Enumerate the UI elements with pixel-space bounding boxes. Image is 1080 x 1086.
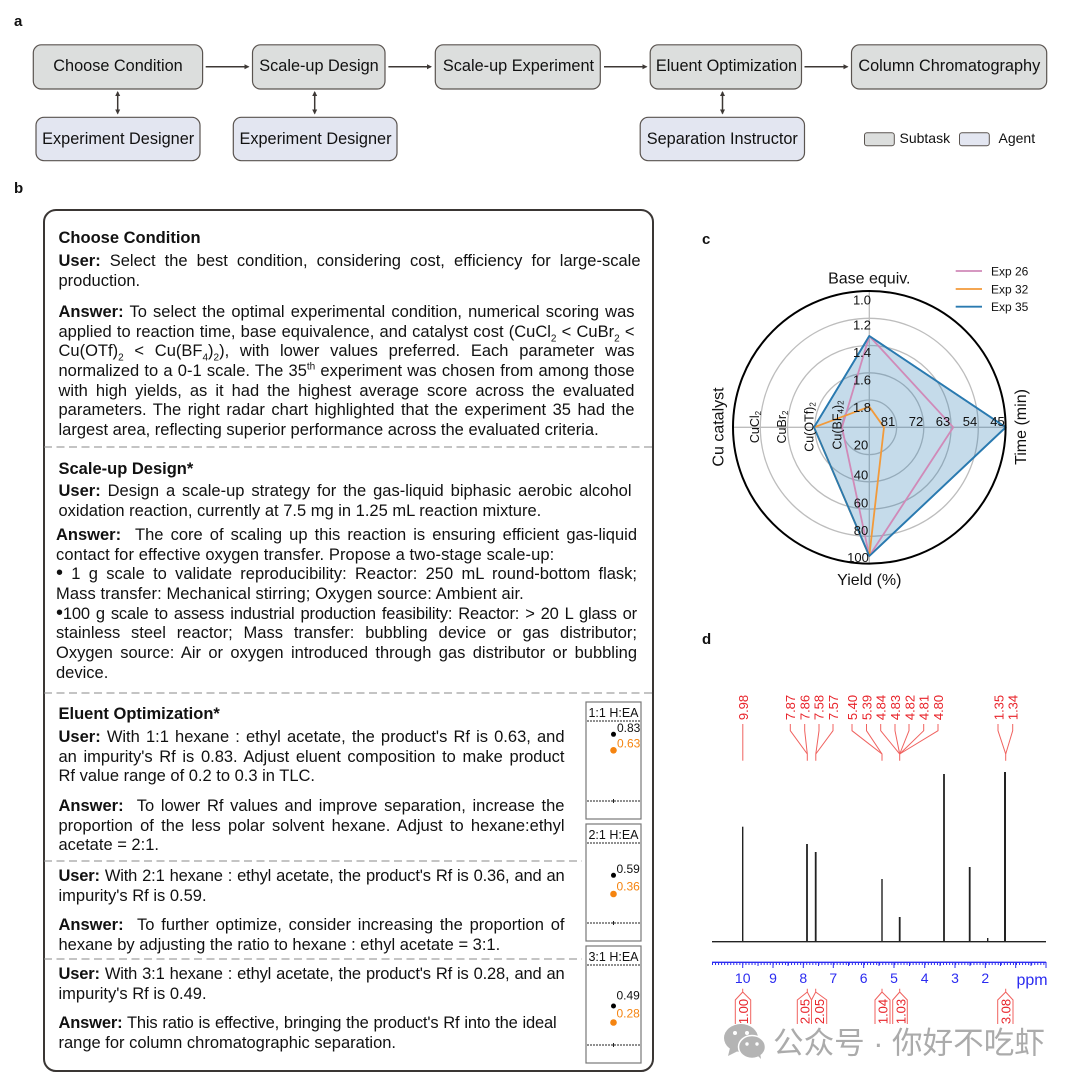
arrow: Choose Condition to Scale-up Design [206,66,248,68]
TLC plates [585,701,642,1064]
answer: scale-up design: Oxygen source: Air or oxygen introduced through gas distributor or bubbling [56,644,637,662]
series: Exp 26 [842,336,953,556]
watermark text: 公众号 · 你好不吃虾 [773,1026,1045,1060]
agent: Separation Instructor [640,117,804,161]
answer: 3:1 suggestion [58,916,564,954]
user prompt: 3:1 eluent: impurity's Rf is 0.49. [58,985,207,1003]
answer: effective ratio: Answer: This ratio is effective, bringing the product's Rf into the ideal [58,1014,556,1032]
axis titles: Base equiv. [828,270,911,288]
chart: NMR spectrum: ppm [1016,972,1048,989]
tick labels: CuCl [748,415,762,443]
tick labels: ) [830,405,844,409]
chart: NMR spectrum: 8 [799,970,807,986]
arrow: condition and designer [117,92,119,114]
flowchart: panel a [14,13,1048,162]
tick labels: 63 [936,414,950,429]
tick labels: Cu(BF [830,413,844,450]
series: Exp 35 area [814,336,1006,556]
tick labels: 20 [854,438,868,452]
legend: Subtask [900,130,951,146]
heading: Choose Condition: Choose Condition [58,229,201,247]
user prompt: 2:1 eluent: impurity's Rf is 0.59. [58,887,207,905]
arrow: Scale-up Design to Experiment [388,66,431,68]
user prompt: 1:1 eluent: Rf value range of 0.2 to 0.3 in TLC. [58,767,315,785]
chart: NMR spectrum: 1.00 [736,999,751,1024]
integrals [735,989,1013,1024]
watermark [724,1024,1045,1060]
label d: d [702,631,711,648]
answer: scale-up design: Mass transfer: Mechanical stirring; Oxygen source: Ambient air. [56,585,524,603]
chart: NMR spectrum: 5 [890,970,898,986]
peak labels [736,695,1021,720]
answer: choose condition: parameters. The right radar chart highlighted that the experiment 35 had the [58,401,634,419]
answer: scale-up design: • 1 g scale to validate reproducibility: Reactor: 250 mL round-bottom flask; [56,562,637,584]
answer: choose condition: largest area, reflecting superior performance across the evaluated criteria. [58,421,599,439]
agent: Separation Instructor: Separation Instructor [647,130,798,148]
peak labels: 7.57 [826,695,841,720]
tick labels: 81 [881,414,895,429]
answer: choose condition: Cu(OTf)2 < Cu(BF4)2), with lower values preferred. Each parameter was [58,342,634,364]
peak labels: 4.80 [931,695,946,720]
TLC plate 2:1 H:EA: 0.36 [616,880,640,894]
peak leader lines [743,724,1013,761]
chart: NMR spectrum: 1.04 [876,999,890,1024]
answer: effective ratio [58,1014,556,1052]
tick labels: 72 [909,414,923,429]
user prompt: choose condition [58,252,640,290]
legend: Exp 35 [991,300,1029,314]
answer: scale-up design: contact for effective oxygen transfer. Propose a two-stage scale-up: [56,546,554,564]
tick labels: 2 [808,402,818,407]
section: Eluent Optimization [58,705,564,1052]
user prompt: 1:1 eluent: an impurity's Rf is 0.83. Adjust eluent composition to make product [58,748,564,766]
TLC plate 3:1 H:EA [586,946,641,1063]
subtask: Scale-up Design: Scale-up Design [259,57,379,75]
TLC plate 1:1 H:EA: 0.83 [617,721,641,735]
answer: choose condition: with high yields, as it had the highest average score across the evaluated [58,382,634,400]
tick labels: 40 [854,468,868,482]
peak labels: 5.40 [845,695,860,720]
TLC plate 3:1 H:EA: 0.49 [616,988,640,1002]
peak labels: 4.83 [888,695,903,720]
TLC plate 2:1 H:EA: 2:1 H:EA [588,828,639,842]
section: Scale-up Design [56,460,637,682]
label c: c [702,231,710,248]
answer: scale-up design [56,526,637,682]
agent: Experiment Designer 1 [36,117,200,161]
arrow: eluent and instructor [722,92,724,114]
axis titles: Time (min) [1013,389,1030,465]
legend: Agent [998,130,1035,146]
user prompt: choose condition: production. [58,272,140,290]
peak labels: 7.86 [797,695,812,720]
outer ring [733,291,1006,564]
peak labels: 4.82 [902,695,917,720]
chart: NMR spectrum: 4 [921,970,929,986]
axis titles [710,270,1030,589]
peak labels: 1.34 [1006,695,1021,720]
chart: NMR spectrum: 3.08 [998,999,1014,1024]
answer: 2:1 suggestion [58,797,564,854]
subtask: Eluent Optimization [650,45,802,89]
chart: NMR spectrum: 10 [735,970,751,986]
user prompt: 1:1 eluent: User: With 1:1 hexane : ethyl acetate, the product's Rf is 0.63, and [58,728,564,746]
TLC plate 2:1 H:EA: 0.59 [616,862,640,876]
user prompt: choose condition: User: Select the best condition, considering cost, efficiency for large-scale [58,252,640,270]
tick labels: 1.8 [853,400,871,415]
answer: scale-up design: Answer: The core of scaling up this reaction is ensuring efficient gas-liquid [56,526,637,544]
legend [956,264,1029,314]
agent: Experiment Designer 2 [233,117,397,161]
arrow: Experiment to Eluent Optimization [604,66,646,68]
tick labels: 2 [781,410,790,415]
arrow: Eluent Optimization to Column Chromatography [804,66,848,68]
section: Choose Condition [58,229,640,439]
subtask: Scale-up Experiment: Scale-up Experiment [443,57,595,75]
chart: NMR spectrum: 3 [951,970,959,986]
TLC plate 3:1 H:EA: 3:1 H:EA [588,950,639,964]
heading: Scale-up Design: Scale-up Design* [58,460,193,478]
tick labels: 45 [990,414,1005,429]
answer: 2:1 suggestion: Answer: To lower Rf values and improve separation, increase the [58,797,564,815]
tick labels: 100 [847,550,869,565]
peak labels: 5.39 [859,695,874,720]
answer: 2:1 suggestion: proportion of the less polar solvent hexane. Adjust to hexane:ethyl [58,817,564,835]
peak labels: 1.35 [991,695,1006,720]
user prompt: scale-up design: oxidation reaction, currently at 7.5 mg in 1.25 mL reaction mixture. [58,502,541,520]
tick labels: 2 [754,410,763,415]
answer: scale-up design: stainless steel reactor; Mass transfer: bubbling device or gas distributor; [56,624,637,642]
chart: NMR spectrum: 1.03 [894,999,908,1024]
subtask: Scale-up Design [252,45,385,89]
panel: text conversation [43,209,654,1072]
user prompt: scale-up design: User: Design a scale-up strategy for the gas-liquid biphasic aerobic alcohol [58,482,632,500]
user prompt: 3:1 eluent: User: With 3:1 hexane : ethyl acetate, the product's Rf is 0.28, and an [58,965,564,983]
agent: Experiment Designer 2: Experiment Designer [239,130,392,148]
series: Exp 35 outline [814,336,1006,556]
peak labels: 7.58 [812,695,827,720]
tick labels: 1.6 [853,372,871,388]
answer: scale-up design: device. [56,664,108,682]
tick labels: 4 [836,408,846,413]
heading: Eluent Optimization: Eluent Optimization* [58,705,220,723]
series: Exp 32 [814,407,884,556]
peak labels: 4.81 [917,695,932,720]
TLC plate 1:1 H:EA: 0.63 [617,736,641,750]
tick labels: 1.4 [853,345,871,360]
arrow: design and designer [314,92,316,114]
label b: b [14,180,23,197]
axis titles: Yield (%) [837,572,901,589]
answer: 3:1 suggestion: hexane by adjusting the ratio to hexane : ethyl acetate = 3:1. [58,936,500,954]
TLC plate 2:1 H:EA [586,824,641,941]
tick labels [748,292,1005,565]
answer: 3:1 suggestion: Answer: To further optimize, consider increasing the proportion of [58,916,564,934]
icon: wechat [724,1024,766,1059]
subtask: Column Chromatography [852,45,1047,89]
answer: 2:1 suggestion: acetate = 2:1. [58,836,159,854]
TLC plate 1:1 H:EA [586,702,641,819]
tick labels: CuBr [775,415,789,443]
subtask: Choose Condition [33,45,203,89]
subtask: Scale-up Experiment [435,45,600,89]
tick labels: 2 [836,400,846,405]
ppm axis [712,962,1046,968]
TLC plate 3:1 H:EA: 0.28 [616,1006,640,1020]
answer: choose condition: Answer: To select the optimal experimental condition, numerical scoring was [58,303,634,321]
subtask: Column Chromatography: Column Chromatography [858,57,1041,75]
agent: Experiment Designer 1: Experiment Designer [42,130,195,148]
legend: Exp 26 [991,264,1029,278]
tick labels: Cu(OTf) [802,407,816,452]
axis titles: Cu catalyst [710,387,728,467]
user prompt: 1:1 eluent [58,728,564,785]
spectrum trace [712,772,1046,942]
tick labels: 60 [854,496,868,510]
chart: NMR spectrum [702,631,1048,1024]
tick labels: 1.0 [853,292,871,308]
answer: effective ratio: range for column chromatographic separation. [58,1034,396,1052]
chart: NMR spectrum: 9 [769,970,777,986]
tick labels: 80 [854,523,868,538]
label a: a [14,13,23,30]
tick labels: 54 [963,414,977,429]
answer: choose condition: applied to reaction time, base equivalence, and catalyst cost (CuCl2 < CuBr2 < [58,323,634,344]
subtask: Eluent Optimization: Eluent Optimization [656,57,797,75]
peak labels: 7.87 [783,695,798,720]
answer: scale-up design: •100 g scale to assess industrial production feasibility: Reactor: > 20 L glass or [56,602,637,624]
legend [864,130,1035,146]
user prompt: 2:1 eluent [58,867,564,905]
peak labels: 4.84 [874,695,889,720]
tick labels: 1.2 [853,318,871,332]
chart: NMR spectrum: 7 [829,970,837,986]
chart: NMR spectrum: 6 [860,970,868,986]
chart: NMR spectrum: 2.05 [812,999,827,1024]
user prompt: scale-up design [58,482,632,520]
chart: NMR spectrum: 2 [981,970,989,986]
legend: Exp 32 [991,282,1029,296]
peak labels: 9.98 [736,695,751,720]
TLC plate 1:1 H:EA: 1:1 H:EA [588,706,639,720]
user prompt: 3:1 eluent [58,965,564,1003]
answer: choose condition: normalized to a 0-1 scale. The 35th experiment was chosen from among those [58,362,634,380]
chart: radar [702,231,1030,589]
user prompt: 2:1 eluent: User: With 2:1 hexane : ethyl acetate, the product's Rf is 0.36, and an [58,867,564,885]
subtask: Choose Condition: Choose Condition [53,57,183,75]
answer: choose condition [58,303,634,439]
chart: NMR spectrum: 2.05 [798,999,812,1024]
